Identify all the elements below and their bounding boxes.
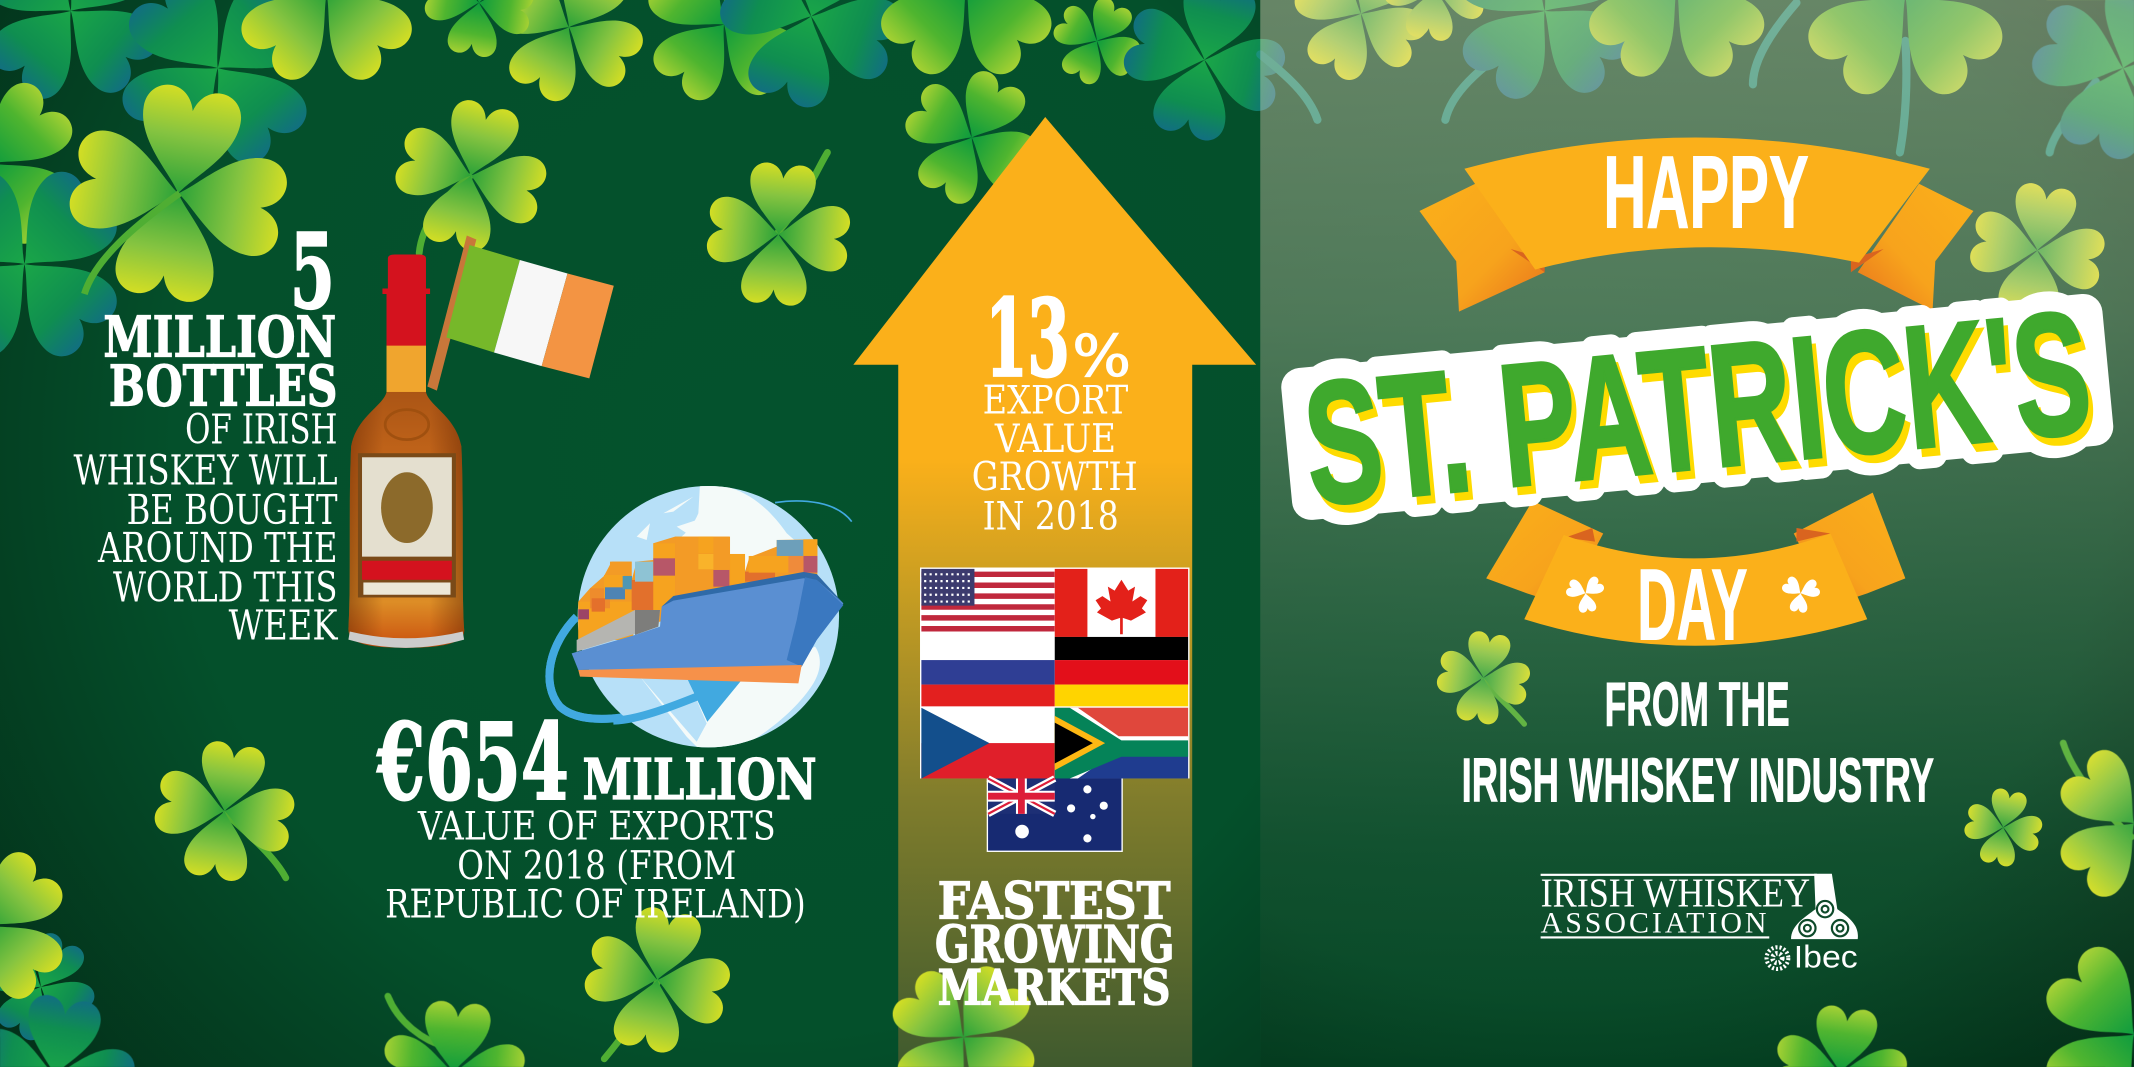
text: from the irish whiskey industry: FROM THE (1605, 669, 1790, 739)
logo: Irish Whiskey Association: Ibec (1794, 940, 1858, 975)
stat: 5 million bottles: BE BOUGHT (127, 486, 338, 534)
flag: Germany (1055, 637, 1188, 706)
shamrock: centre top (702, 152, 855, 310)
stat: 13 percent export value growth: VALUE (994, 416, 1116, 462)
heading: fastest growing markets: FASTEST (938, 872, 1170, 931)
shamrock: bottom right (2028, 919, 2134, 1067)
ribbon: day: DAY (1637, 550, 1747, 662)
flag: South Africa (1055, 708, 1188, 778)
flag: Russia (921, 637, 1055, 706)
heading: fastest growing markets: GROWING (935, 915, 1175, 974)
stat: 5 million bottles: OF IRISH (185, 406, 338, 454)
icon: pot still (1791, 874, 1858, 939)
shamrock: behind arrow tip (883, 48, 1061, 227)
stat: 5 million bottles: 5 (290, 212, 335, 333)
stat: 13 percent export value growth: % (1072, 324, 1131, 390)
stat: 654 million exports: €654 (376, 700, 569, 825)
icon: flag pole and Irish flag (427, 235, 614, 391)
stat: 654 million exports: REPUBLIC OF IRELAND) (385, 881, 806, 927)
stat: 5 million bottles: WEEK (229, 602, 339, 650)
shamrock cluster: top row (199, 0, 1300, 155)
shamrock: small right (1959, 783, 2048, 872)
ribbon: day (1486, 493, 1905, 662)
shamrock cluster: right panel top (1260, 0, 2051, 152)
shamrock: above bottle (382, 86, 560, 265)
stat: 654 million exports: MILLION (582, 748, 817, 813)
stat: 5 million bottles: WORLD THIS (113, 564, 338, 612)
shamrock: bottom middle right (1762, 994, 1919, 1067)
shamrock: top right corner (2014, 0, 2134, 161)
background: left panel (0, 0, 1260, 1067)
logo: Irish Whiskey Association (1541, 870, 1858, 975)
stat: 13 percent export value growth: IN 2018 (983, 493, 1119, 539)
logo: Irish Whiskey Association: ASSOCIATION (1541, 906, 1767, 939)
shamrock: right panel behind label (1962, 175, 2113, 326)
flag: Canada (1055, 569, 1188, 637)
logo: Irish Whiskey Association: IRISH WHISKEY (1541, 870, 1810, 915)
flag: Australia (988, 778, 1121, 851)
heading: fastest growing markets (935, 872, 1175, 1016)
shamrock: beside from the (1431, 625, 1536, 730)
shamrock: lower left (146, 733, 303, 890)
text: from the irish whiskey industry (1462, 669, 1934, 816)
icon: globe with container ship and arrow (549, 483, 852, 753)
stat: 654 million exports (376, 700, 817, 927)
stat: 5 million bottles: WHISKEY WILL (73, 447, 338, 495)
arrow (853, 117, 1256, 1067)
stat: 5 million bottles: AROUND THE (97, 524, 338, 572)
shamrock: under exports text (574, 896, 741, 1063)
shamrock cluster: top left (0, 0, 356, 403)
shamrock: on arrow base (878, 953, 1048, 1067)
background: right panel (1260, 0, 2134, 1067)
flag: Czech Republic (921, 708, 1055, 778)
icon: whiskey bottle (348, 255, 464, 648)
stat: 5 million bottles: BOTTLES (109, 355, 338, 420)
shamrock cluster: bottom left corner (0, 815, 144, 1067)
shamrock: bottom centre left (367, 987, 538, 1067)
stat: 13 percent export value growth: 13 (985, 277, 1070, 402)
ribbon: happy: HAPPY (1603, 133, 1809, 249)
stat: 13 percent export value growth: EXPORT (983, 378, 1128, 424)
stat: 654 million exports: ON 2018 (FROM (457, 843, 736, 889)
stat: 13 percent export value growth (972, 277, 1138, 539)
icon: small white shamrock left (1563, 574, 1609, 615)
shamrock: right edge (2041, 735, 2134, 912)
stat: 654 million exports: VALUE OF EXPORTS (417, 804, 776, 850)
stat: 5 million bottles (73, 212, 339, 650)
flag: USA (921, 569, 1055, 637)
stat: 13 percent export value growth: GROWTH (972, 454, 1138, 500)
ribbon: happy (1419, 133, 1973, 312)
flags: fastest growing markets (920, 568, 1189, 852)
icon: Ibec dot mark (1767, 947, 1788, 969)
heading: fastest growing markets: MARKETS (938, 958, 1170, 1016)
stat: 5 million bottles: MILLION (103, 306, 336, 371)
right panel light veil (1260, 0, 2134, 1067)
icon: small white shamrock right (1777, 574, 1823, 615)
